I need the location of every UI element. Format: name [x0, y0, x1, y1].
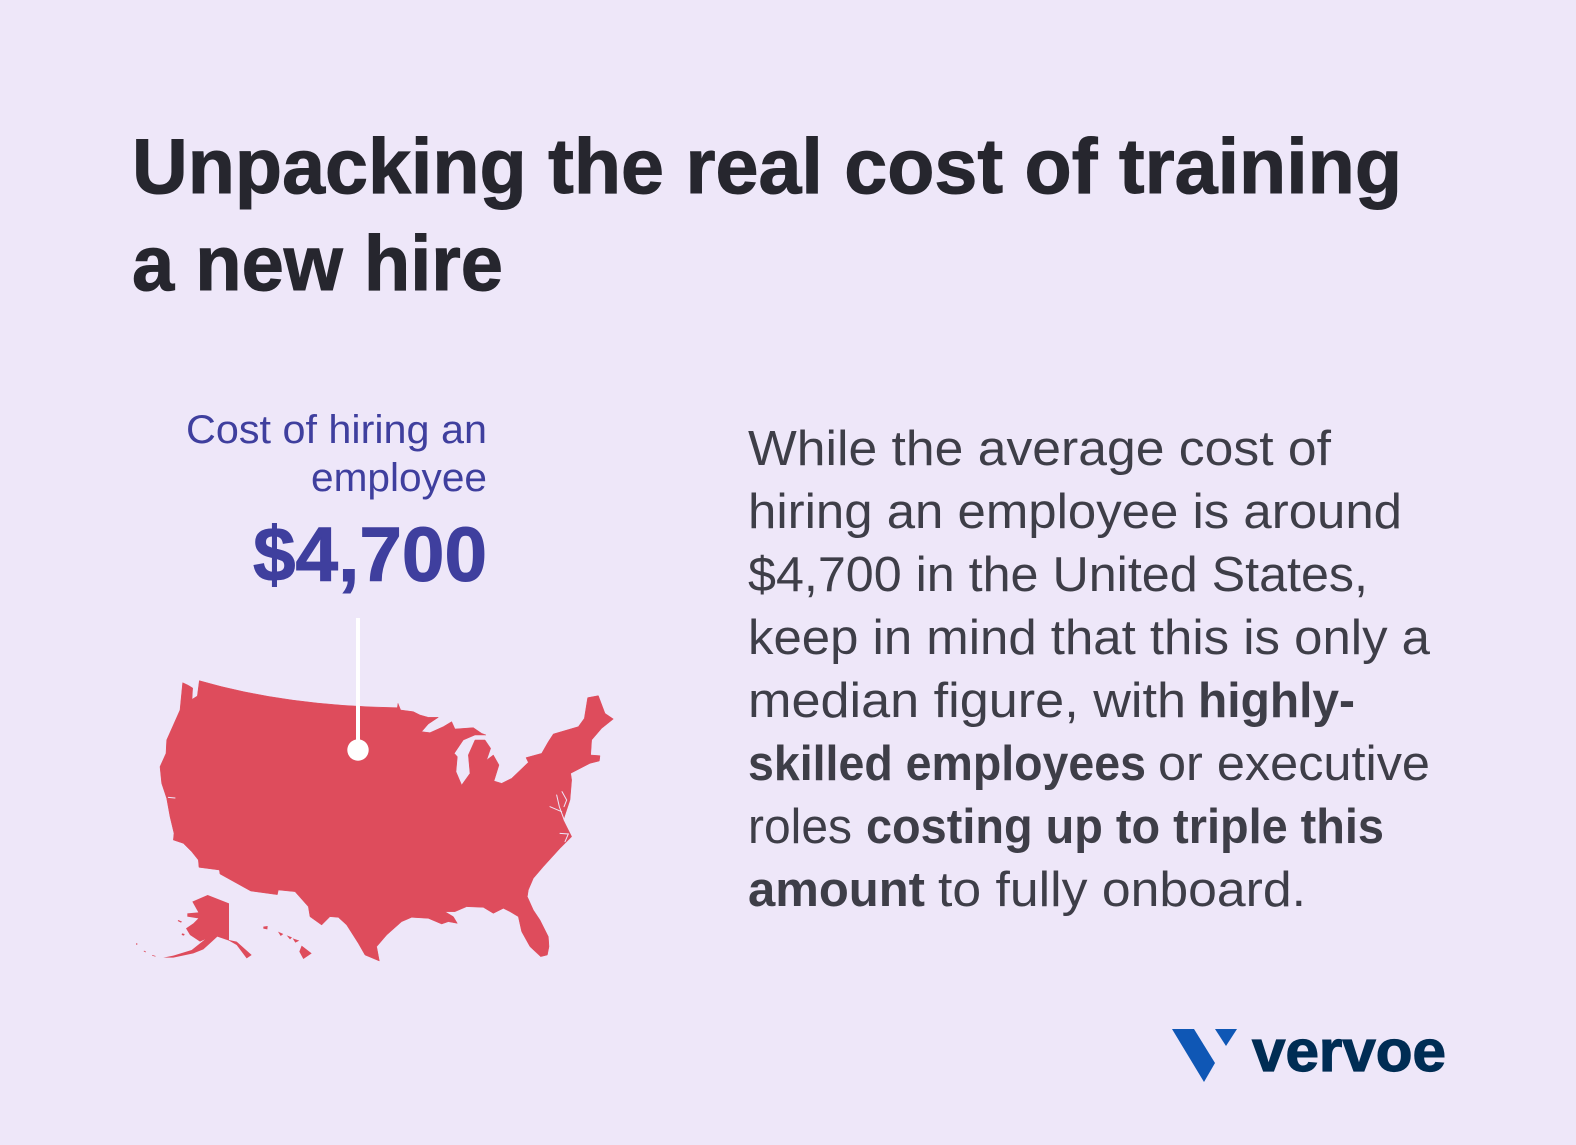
body paragraph: costing up to triple this [866, 800, 1384, 854]
body paragraph: to fully onboard. [938, 863, 1306, 917]
Hawaii [263, 926, 312, 959]
cost figure: $4,700 [253, 512, 487, 598]
map label: cost of hiring an employee: employee [311, 456, 487, 500]
body paragraph: While the average cost of [748, 422, 1331, 476]
Aleutian islands [136, 920, 185, 957]
body paragraph: skilled employees [748, 737, 1146, 791]
contiguous states [160, 681, 613, 961]
logo wordmark: vervoe [1252, 1019, 1446, 1084]
title [132, 122, 1402, 307]
logo mark [1172, 1029, 1237, 1082]
body paragraph [748, 422, 1431, 917]
Alaska [163, 895, 252, 958]
title: Unpacking the real cost of training [132, 122, 1402, 210]
map label: cost of hiring an employee: Cost of hiring an [186, 408, 487, 452]
body paragraph: hiring an employee is around [748, 485, 1402, 539]
title: a new hire [132, 219, 503, 307]
body paragraph: highly- [1198, 674, 1355, 728]
body paragraph: or executive [1158, 737, 1430, 791]
logo: vervoe [1172, 1019, 1446, 1084]
map pin [347, 618, 369, 761]
body paragraph: median figure, with [748, 674, 1186, 728]
map label: cost of hiring an employee [186, 408, 487, 500]
map: United States [136, 681, 613, 961]
body paragraph: $4,700 in the United States, [748, 548, 1368, 602]
bays and inlets [168, 767, 588, 842]
body paragraph: keep in mind that this is only a [748, 611, 1431, 665]
body paragraph: amount [748, 863, 925, 917]
body paragraph: roles [748, 800, 852, 854]
